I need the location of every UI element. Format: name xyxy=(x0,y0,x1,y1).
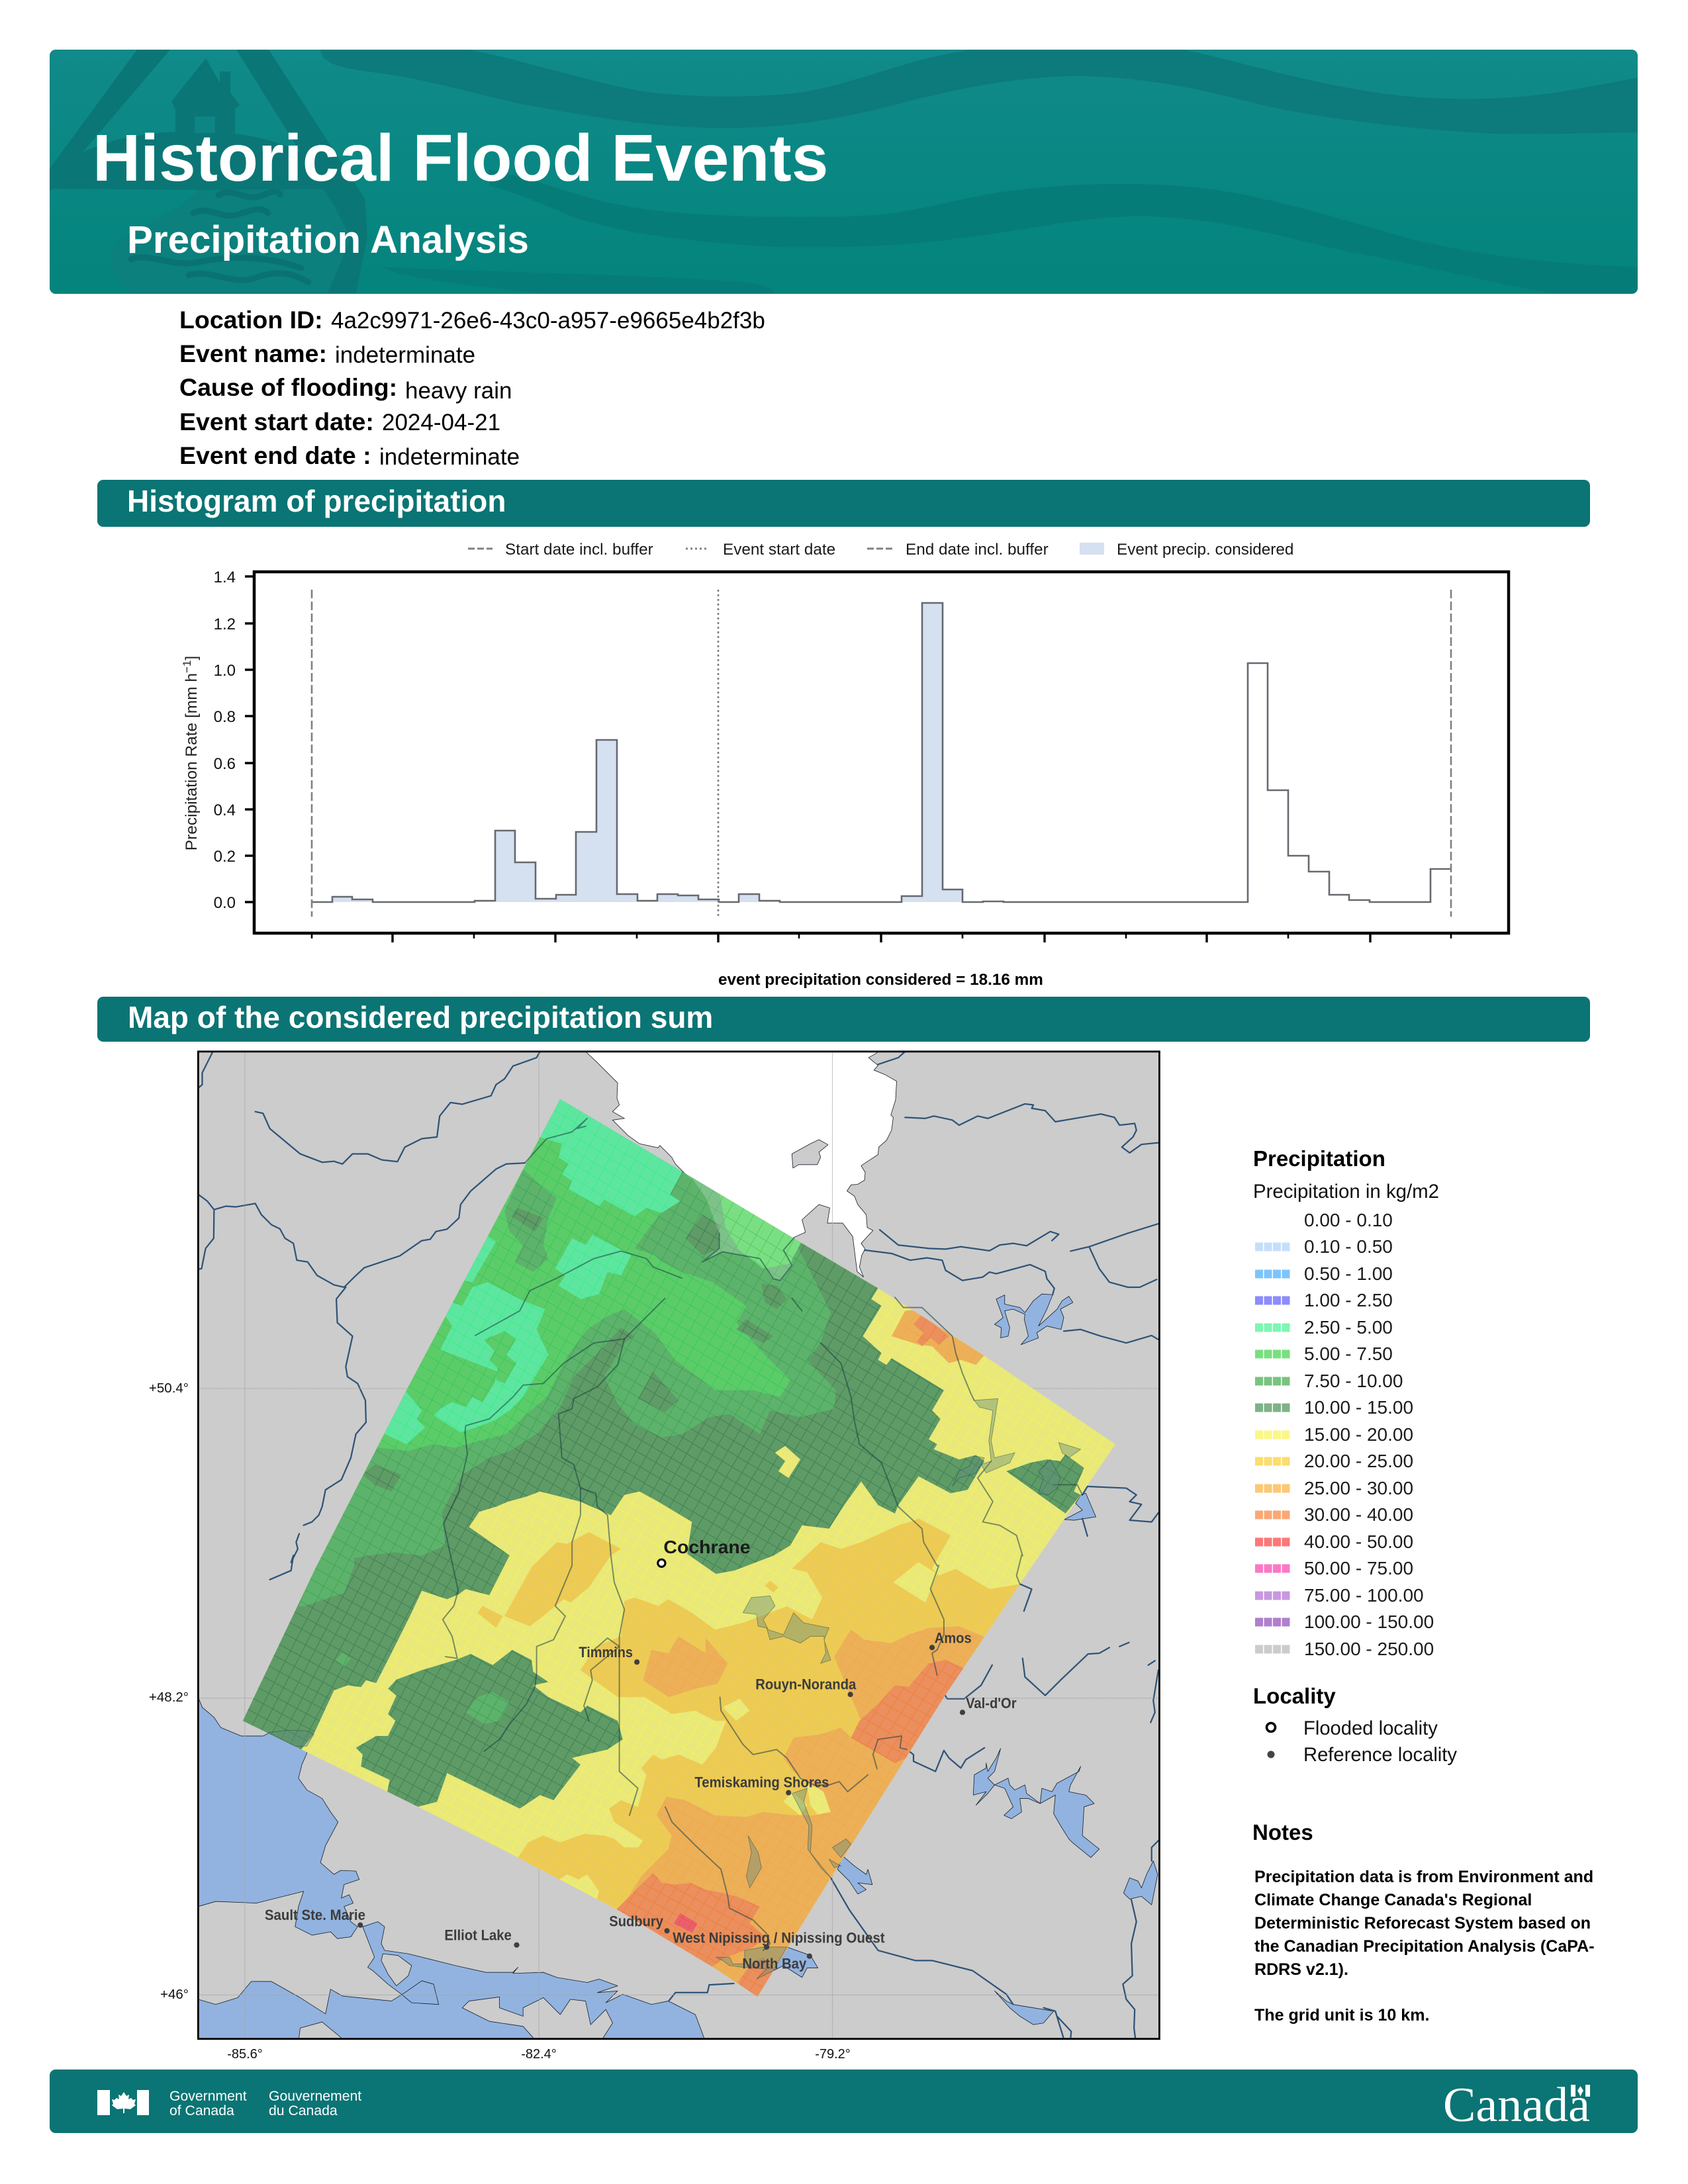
event metadata: Event start date: xyxy=(179,408,374,435)
y ticks and labels: 0.4 xyxy=(214,801,236,819)
reference localities: Timmins xyxy=(579,1644,633,1661)
light green cells above open water xyxy=(185,1039,1199,2052)
government wordmark: of Canada xyxy=(169,2103,234,2118)
y ticks and labels: 1.4 xyxy=(214,569,236,586)
class 10-15 xyxy=(185,1039,1199,2052)
reference localities: West Nipissing / Nipissing Ouest xyxy=(673,1929,885,1946)
map latitude labels: +50.4° xyxy=(149,1381,189,1396)
histogram step line xyxy=(312,603,1451,902)
section heading: map xyxy=(97,997,1590,1042)
class 5-7.5 inside mint area xyxy=(185,1039,1199,2052)
notes: The grid unit is 10 km. xyxy=(1254,2006,1429,2025)
legend: precipitation: 50.00 - 75.00 xyxy=(1304,1558,1413,1578)
subtitle: Precipitation Analysis xyxy=(127,218,529,261)
y ticks and labels: 1.0 xyxy=(214,662,236,680)
graticule xyxy=(198,1052,1159,2039)
histogram legend: Event precip. considered xyxy=(1117,541,1293,559)
notes: RDRS v2.1). xyxy=(1254,1960,1348,1979)
legend: locality: Locality xyxy=(1253,1684,1336,1708)
end date with buffer line xyxy=(1450,590,1452,917)
header banner xyxy=(50,50,1638,294)
canada wordmark: Canada xyxy=(1443,2078,1590,2132)
notes: Notes xyxy=(1252,1820,1313,1844)
legend: precipitation: 25.00 - 30.00 xyxy=(1304,1478,1413,1498)
legend: locality xyxy=(1253,1684,1457,1766)
legend: precipitation: 30.00 - 40.00 xyxy=(1304,1504,1413,1525)
event metadata: indeterminate xyxy=(335,342,475,368)
legend: precipitation: 7.50 - 10.00 xyxy=(1304,1371,1403,1391)
legend: precipitation: 100.00 - 150.00 xyxy=(1304,1612,1434,1632)
legend: precipitation: 75.00 - 100.00 xyxy=(1304,1585,1424,1606)
legend: precipitation: 0.50 - 1.00 xyxy=(1304,1263,1393,1284)
event metadata: Event end date : xyxy=(179,441,371,469)
legend swatches xyxy=(1255,1247,1290,1649)
event metadata: Location ID: xyxy=(179,306,323,334)
map longitude labels: -79.2° xyxy=(815,2047,851,2062)
reference localities: Sault Ste. Marie xyxy=(265,1907,365,1923)
y ticks and labels: 1.2 xyxy=(214,615,236,633)
event metadata: Event name: xyxy=(179,340,327,367)
legend: precipitation: 40.00 - 50.00 xyxy=(1304,1531,1413,1552)
y ticks and labels: 0.8 xyxy=(214,708,236,726)
wave: lower background band xyxy=(382,170,1638,293)
y ticks and labels: 0.6 xyxy=(214,755,236,773)
precipitation grid overlay xyxy=(242,1099,1115,1997)
reference localities: Amos xyxy=(935,1630,972,1647)
event metadata: heavy rain xyxy=(405,378,512,404)
government wordmark: Government xyxy=(169,2089,247,2104)
legend: precipitation: Precipitation xyxy=(1253,1146,1385,1171)
legend: locality: Flooded locality xyxy=(1303,1718,1438,1739)
class 2.5-5 xyxy=(185,1039,1199,2052)
class 15-20 xyxy=(243,1100,1115,1996)
start date with buffer line xyxy=(311,590,312,917)
legend: precipitation: Precipitation in kg/m2 xyxy=(1253,1181,1439,1203)
class 15-20 lobes xyxy=(185,1039,1199,2052)
y ticks and labels: 0.0 xyxy=(214,894,236,912)
y ticks and labels xyxy=(214,569,254,912)
class 5-7.5 xyxy=(185,1039,1199,2052)
reference localities: Val-d'Or xyxy=(966,1695,1017,1711)
map longitude labels: -82.4° xyxy=(521,2047,557,2062)
precipitation map xyxy=(185,1039,1199,2052)
event metadata: 2024-04-21 xyxy=(382,410,500,435)
overlay lightened above open water xyxy=(185,1039,1199,2052)
map longitude labels: -85.6° xyxy=(227,2047,263,2062)
histogram legend: Event start date xyxy=(723,541,835,559)
government wordmark xyxy=(169,2089,361,2118)
notes: Climate Change Canada's Regional xyxy=(1254,1891,1532,1909)
notes: the Canadian Precipitation Analysis (CaPA- xyxy=(1254,1937,1595,1956)
reference localities xyxy=(265,1630,1017,1972)
reference localities: North Bay xyxy=(742,1956,807,1972)
map frame xyxy=(198,1052,1159,2039)
class 10-15 patches xyxy=(185,1039,1199,2052)
histogram legend: Start date incl. buffer xyxy=(505,541,653,559)
notes: Deterministic Reforecast System based on xyxy=(1254,1914,1591,1933)
legend: precipitation: 15.00 - 20.00 xyxy=(1304,1424,1413,1445)
legend: locality: Reference locality xyxy=(1303,1745,1457,1766)
notes: Precipitation data is from Environment and xyxy=(1254,1868,1593,1886)
great lakes and inland water xyxy=(198,1294,1158,2042)
legend: precipitation: 10.00 - 15.00 xyxy=(1304,1397,1413,1418)
event metadata: indeterminate xyxy=(379,444,520,470)
histogram legend xyxy=(468,541,1293,559)
y axis label: Precipitation Rate [mm h xyxy=(183,673,201,850)
map latitude labels: +46° xyxy=(160,1987,189,2002)
notes xyxy=(1252,1820,1595,2025)
histogram legend: End date incl. buffer xyxy=(906,541,1049,559)
reference localities: Rouyn-Noranda xyxy=(755,1676,857,1693)
class 40-50 xyxy=(185,1039,1199,2052)
map longitude labels xyxy=(227,2047,851,2062)
legend: precipitation: 150.00 - 250.00 xyxy=(1304,1639,1434,1659)
y ticks and labels: 0.2 xyxy=(214,848,236,866)
map latitude labels xyxy=(149,1381,189,2002)
legend: precipitation: 1.00 - 2.50 xyxy=(1304,1290,1393,1310)
event start date line xyxy=(718,590,719,917)
legend: precipitation: 20.00 - 25.00 xyxy=(1304,1451,1413,1471)
section heading: histogram: Histogram of precipitation xyxy=(127,484,506,518)
title: Historical Flood Events xyxy=(93,121,828,195)
government wordmark: du Canada xyxy=(269,2103,338,2118)
event precipitation total: event precipitation considered = 18.16 mm xyxy=(718,971,1043,989)
y axis label: ] xyxy=(183,656,201,660)
rivers and lakes seen through the overlay xyxy=(268,1118,1082,1979)
rivers outside the model domain xyxy=(198,1052,1158,2039)
event metadata: 4a2c9971-26e6-43c0-a957-e9665e4b2f3b xyxy=(331,308,765,334)
class 7.5-10 xyxy=(185,1039,1199,2052)
class 25-30 xyxy=(185,1039,1199,2052)
icon: canadian flag xyxy=(97,2090,149,2115)
flooded locality: Cochrane: Cochrane xyxy=(663,1537,751,1557)
section heading: histogram xyxy=(97,480,1590,527)
wave: upper background band xyxy=(320,50,1638,134)
event metadata: Cause of flooding: xyxy=(179,373,397,401)
government wordmark: Gouvernement xyxy=(269,2089,361,2104)
legend: precipitation: 0.10 - 0.50 xyxy=(1304,1236,1393,1257)
map latitude labels: +48.2° xyxy=(149,1690,189,1705)
reference localities: Sudbury xyxy=(609,1913,663,1929)
legend: precipitation: 0.00 - 0.10 xyxy=(1304,1210,1393,1230)
class 15-20 hole xyxy=(185,1039,1199,2052)
x ticks xyxy=(393,933,1370,942)
flooded locality: Cochrane xyxy=(658,1537,751,1567)
james bay water xyxy=(586,1052,896,1281)
axes frame xyxy=(254,572,1509,933)
class 7.5-10 pocket xyxy=(185,1039,1199,2052)
class 30-40 xyxy=(185,1039,1199,2052)
icon: flood warning sign xyxy=(50,50,367,293)
akimiski island xyxy=(792,1140,828,1168)
y axis label: −1 xyxy=(181,660,193,673)
legend: precipitation: 2.50 - 5.00 xyxy=(1304,1317,1393,1338)
reference localities: Temiskaming Shores xyxy=(694,1774,829,1791)
legend: precipitation: 5.00 - 7.50 xyxy=(1304,1343,1393,1364)
precipitation considered fill xyxy=(312,603,962,902)
section heading: map: Map of the considered precipitation sum xyxy=(128,1000,713,1034)
land background xyxy=(198,1052,1159,2039)
reference localities: Elliot Lake xyxy=(444,1927,512,1944)
legend: precipitation xyxy=(1253,1146,1439,1659)
footer banner xyxy=(50,2070,1638,2133)
event metadata xyxy=(179,306,765,470)
histogram chart xyxy=(181,569,1509,942)
class 20-25 xyxy=(185,1039,1199,2052)
